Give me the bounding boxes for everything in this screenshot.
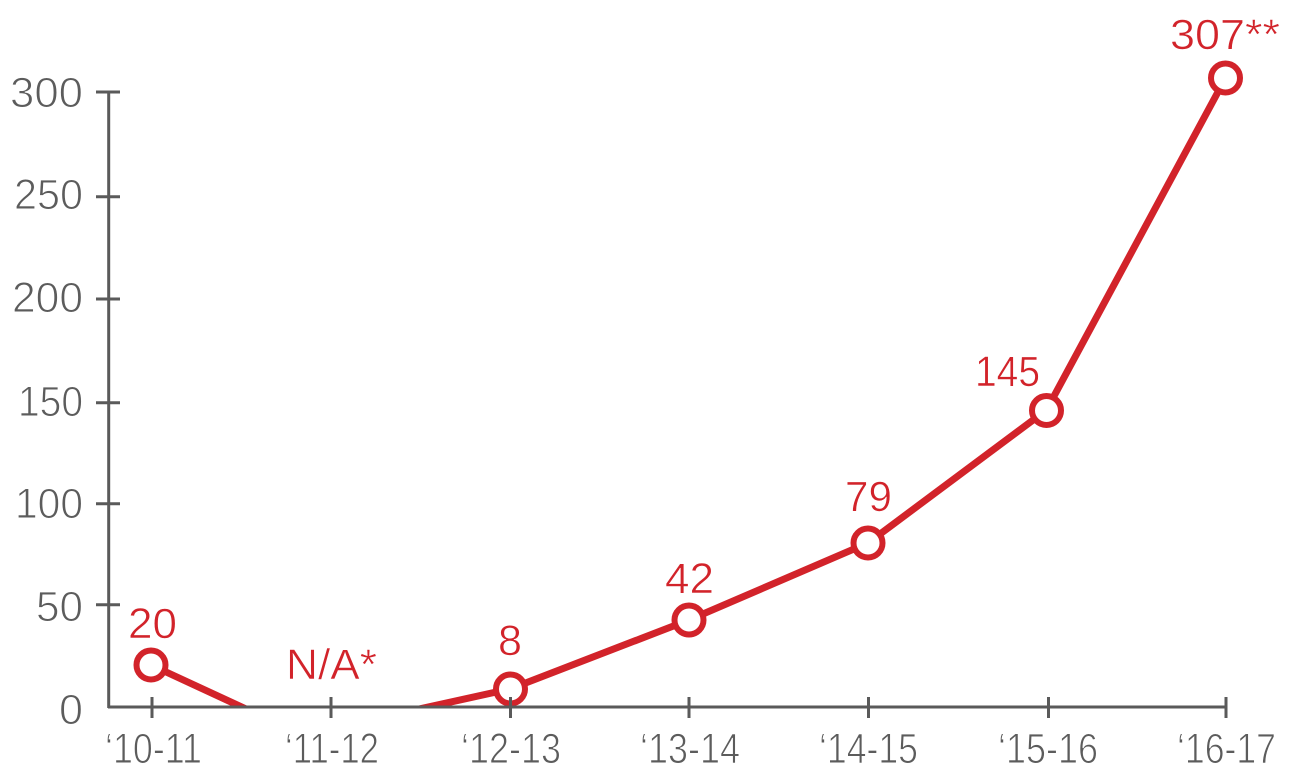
- x axis labels: ‘14-15: [819, 726, 918, 773]
- x axis labels: ‘11-12: [285, 726, 379, 773]
- x axis labels: ‘16-17: [1177, 726, 1276, 773]
- y axis labels: 50: [36, 584, 83, 631]
- data value labels: 20: [128, 600, 177, 648]
- x axis labels: ‘13-14: [640, 726, 740, 773]
- data value labels: 8: [498, 617, 522, 665]
- y axis labels: 0: [59, 687, 83, 734]
- x axis labels: ‘12-13: [461, 726, 561, 773]
- y axis: [10, 70, 120, 734]
- x axis labels: [105, 726, 1276, 773]
- x axis labels: ‘10-11: [105, 726, 202, 773]
- x axis labels: ‘15-16: [998, 726, 1098, 773]
- data line: [151, 78, 1226, 715]
- data value labels: N/A*: [286, 641, 377, 689]
- y axis labels: 300: [10, 70, 83, 117]
- data value labels: 42: [665, 555, 714, 603]
- y axis labels: 100: [15, 481, 83, 528]
- x axis: [105, 697, 1276, 773]
- data value labels: 307**: [1170, 11, 1280, 59]
- data point markers: [136, 64, 1240, 704]
- data value labels: 79: [845, 473, 892, 521]
- y axis labels: [10, 70, 83, 734]
- y axis labels: 250: [14, 172, 83, 219]
- y axis labels: 150: [18, 379, 83, 426]
- y axis labels: 200: [12, 275, 83, 322]
- data value labels: 145: [975, 348, 1040, 396]
- data value labels: [128, 11, 1280, 689]
